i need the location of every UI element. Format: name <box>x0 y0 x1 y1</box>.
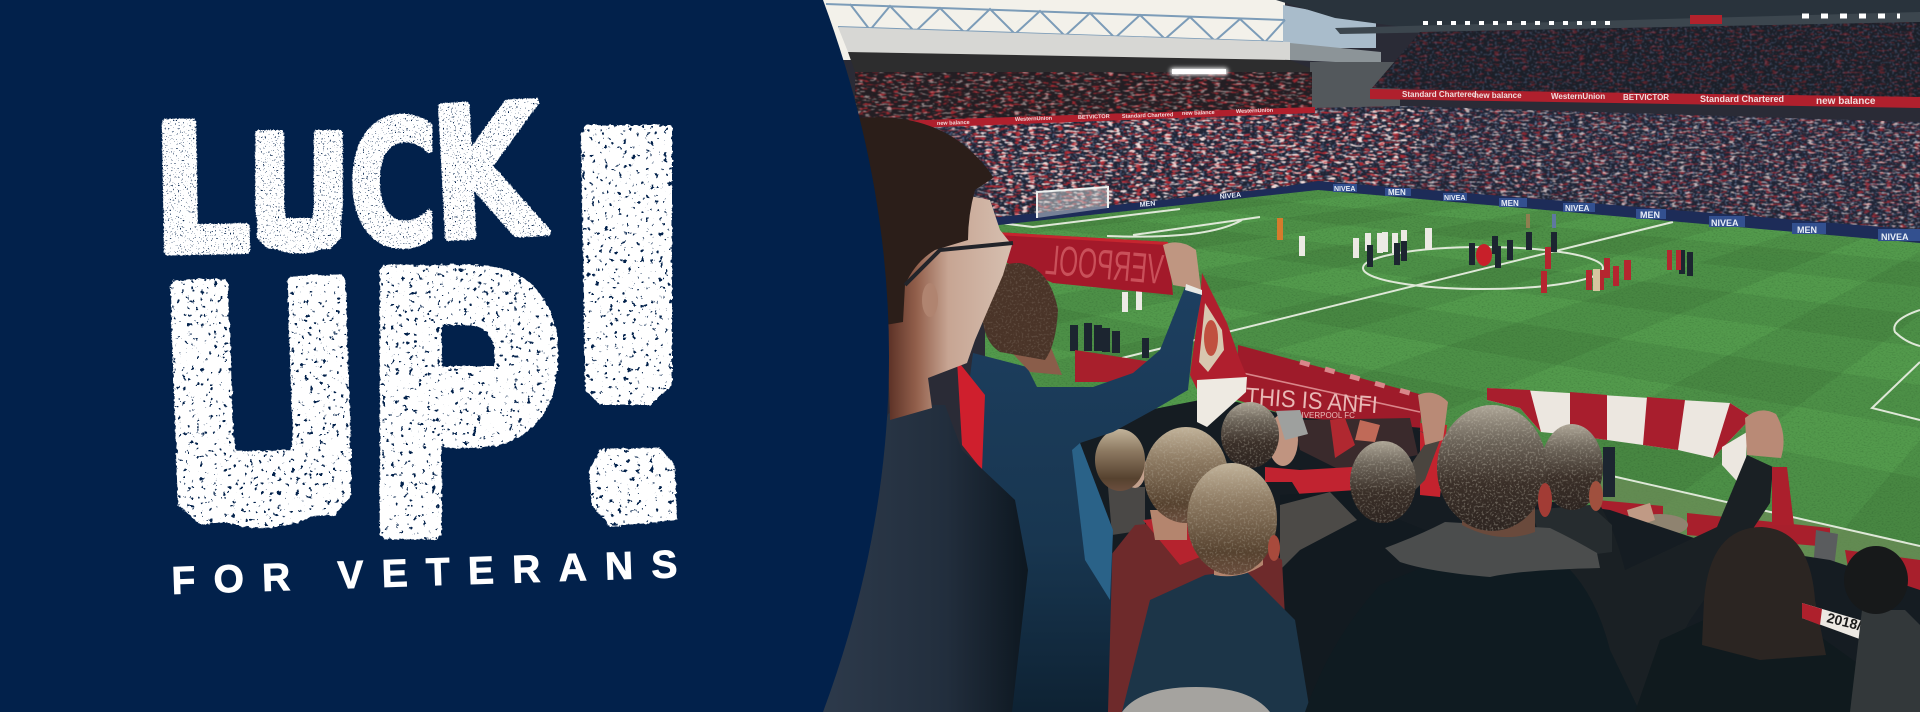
fan: grey-haired man at right <box>1530 424 1773 712</box>
scarf: This Is Anfield: THIS IS ANFI <box>1245 382 1379 418</box>
fan: boy in navy jacket <box>1122 463 1310 712</box>
advertising boards: MEN <box>1797 225 1817 235</box>
sponsor banners on stands: Standard Chartered <box>1122 112 1173 120</box>
poppy wreath <box>1476 244 1492 266</box>
sponsor banners on stands: Standard Chartered <box>1402 90 1477 99</box>
players on pitch <box>1070 214 1693 497</box>
scarf: This Is Anfield: LIVERPOOL FC <box>1297 411 1355 420</box>
advertising boards: NIVEA <box>1219 192 1241 201</box>
fan: woman with dark hair <box>1635 527 1860 712</box>
advertising boards: NIVEA <box>1881 232 1909 242</box>
red banners behind fans <box>1075 350 1920 590</box>
logo word: LUCK: L <box>149 84 253 296</box>
advertising boards: MEN <box>1501 199 1519 208</box>
sponsor banners on stands: new balance <box>1816 96 1876 107</box>
pitch markings <box>985 186 1920 546</box>
fan: brown-haired man with white cap <box>1221 402 1352 503</box>
upper stands <box>855 22 1920 124</box>
logo word: UP!: U <box>148 214 377 598</box>
fan: bald head at bottom <box>1122 687 1270 712</box>
sponsor banners on stands: new balance <box>1182 110 1215 117</box>
scarf: This Is Anfield <box>1237 345 1423 428</box>
logo word: UP!: ! <box>530 20 726 657</box>
sponsor banners on stands: WesternUnion <box>1236 108 1274 115</box>
sponsor banners on stands: new balance <box>1474 91 1522 100</box>
sponsor banners on stands: WesternUnion <box>1015 116 1053 123</box>
advertising boards: NIVEA <box>1565 204 1590 213</box>
advertising boards <box>990 181 1920 243</box>
spectators' hands and hair behind banners <box>1627 503 1838 585</box>
advertising boards: NIVEA <box>1334 186 1355 193</box>
advertising boards: MEN <box>1388 188 1406 197</box>
scarf: 2018/19: 2018/19 <box>1825 609 1878 637</box>
logo word: LUCK: U <box>245 100 353 287</box>
sponsor banners on stands <box>893 89 1920 128</box>
logo word: LUCK: C <box>348 85 438 285</box>
sponsor banners on stands: new balance <box>937 120 970 127</box>
pitch <box>985 190 1920 590</box>
fan: centre man in dark hooded coat <box>1305 405 1640 712</box>
floodlights <box>1170 16 1900 75</box>
lower stand crowd <box>900 106 1920 242</box>
photo: stadium crowd scene <box>800 0 1920 712</box>
sponsor banners on stands: Standard Chartered <box>1700 94 1784 104</box>
player group: white kit <box>1122 228 1432 312</box>
logo: Luck Up! For Veterans <box>161 98 678 594</box>
logo word: LUCK: K <box>425 65 553 282</box>
background crowd mass <box>1000 400 1920 712</box>
sponsor banners on stands: BETVICTOR <box>1623 93 1669 102</box>
officials and staff <box>1070 232 1693 497</box>
tagline: FOR VETERANS <box>171 543 678 603</box>
fan: grey-haired man in dark coat <box>1280 441 1450 712</box>
navy panel with curved edge <box>0 0 889 712</box>
scarf held by man with glasses <box>957 360 985 470</box>
fan: child in grey hat <box>1095 429 1146 535</box>
scarf: Liverpool banner: VERPOOL <box>1044 236 1165 293</box>
logo word: UP!: P <box>358 198 565 620</box>
fan: hand and hanging scarf end <box>1745 410 1794 525</box>
sponsor banners on stands: WesternUnion <box>1551 92 1605 101</box>
sponsor banners on stands: BETVICTOR <box>1078 114 1110 121</box>
stadium roof and sky <box>820 0 1920 112</box>
advertising boards: NIVEA <box>1444 195 1465 202</box>
fan: man with raised scarf <box>962 242 1202 712</box>
scarf: 2018/19 <box>1802 603 1880 645</box>
scarf: red and white stripes <box>1487 388 1752 490</box>
fan: tan-haired child in red jacket <box>1103 427 1290 712</box>
advertising boards: MEN <box>1640 210 1660 220</box>
logo word: UP! <box>170 124 678 540</box>
glasses <box>905 243 1013 285</box>
player group: red kit <box>1541 247 1681 293</box>
scarf: Liverpool crest panel <box>1190 273 1247 427</box>
advertising boards: NIVEA <box>1711 218 1739 228</box>
goal <box>1037 187 1108 218</box>
fans and scarves behind the grey-haired man <box>1293 393 1448 497</box>
logo word: LUCK <box>149 65 553 296</box>
advertising boards: MEN <box>1139 200 1156 209</box>
fan: person at far right <box>1844 546 1920 712</box>
fan: man with glasses in foreground <box>823 117 1028 712</box>
